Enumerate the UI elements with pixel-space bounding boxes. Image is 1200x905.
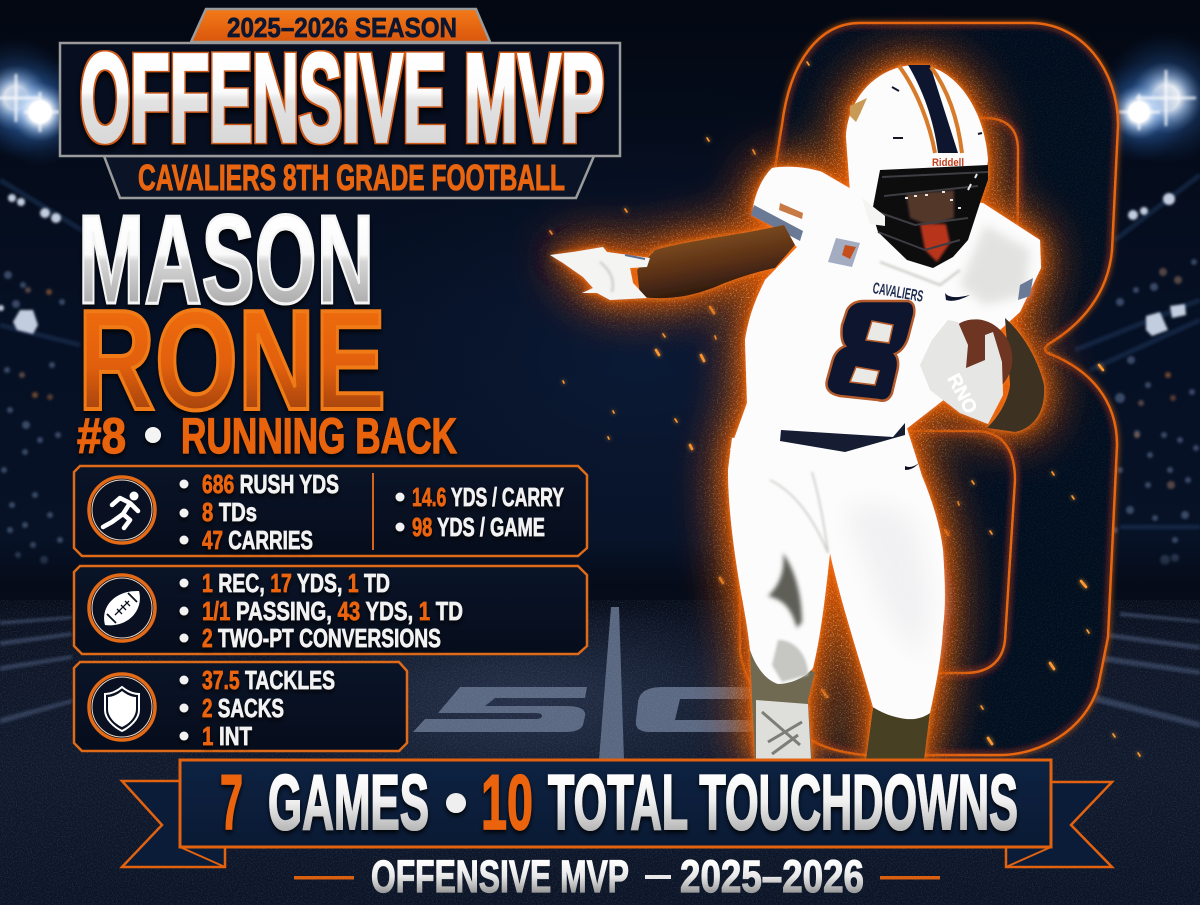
ribbon headline: 7: [220, 758, 243, 846]
rushing list: 686 RUSH YDS: [202, 469, 339, 499]
pants: [728, 422, 945, 719]
yard lines: [0, 612, 1200, 728]
brand mark: Riddell: [932, 157, 964, 169]
far lower leg and cleat: [750, 650, 815, 760]
field: [0, 540, 1200, 905]
icon: runner: [89, 477, 155, 543]
rushing list: 47 CARRIES: [202, 525, 313, 555]
rate list: 98 YDS / GAME: [412, 512, 545, 542]
receiving list: 2 TWO-PT CONVERSIONS: [202, 623, 441, 653]
panel: defensive stats: [74, 662, 407, 751]
jersey number and position: [77, 408, 457, 464]
season tab: 2025–2026 SEASON: [227, 12, 457, 43]
chest wordmark: CAVALIERS: [871, 280, 925, 306]
jersey number and position: #8: [77, 408, 126, 464]
carrying arm: [987, 318, 1044, 432]
rushing list: 8 TDs: [202, 497, 257, 527]
jersey: [730, 167, 1041, 450]
icon: football: [89, 575, 155, 641]
subtitle tab: CAVALIERS 8TH GRADE FOOTBALL: [138, 157, 565, 198]
ribbon main: [180, 760, 1051, 847]
subtitle tab: [104, 156, 594, 198]
rushing list: [180, 469, 339, 555]
player: [550, 65, 1044, 760]
ribbon headline: 10: [481, 758, 533, 846]
helmet: [846, 65, 988, 268]
panel: receiving and passing stats: [74, 566, 587, 654]
near shin: [866, 708, 930, 760]
footer tagline: OFFENSIVE MVP: [371, 851, 629, 902]
stand rails: [0, 175, 1200, 527]
carrying glove: [920, 320, 1003, 424]
receiving list: 1/1 PASSING, 43 YDS, 1 TD: [202, 596, 463, 626]
painted number 0: [636, 687, 760, 732]
crowd highlights: [0, 193, 1186, 336]
defensive list: 37.5 TACKLES: [202, 665, 335, 695]
extended arm: [637, 225, 795, 298]
pointing glove: [550, 247, 650, 300]
ribbon headline: GAMES: [268, 758, 429, 846]
rate list: [396, 482, 564, 542]
giant outlined number 8: [740, 23, 1118, 755]
receiving list: 1 REC, 17 YDS, 1 TD: [202, 568, 390, 598]
chest logo: [828, 238, 860, 267]
receiving list: [180, 568, 463, 653]
star dust inside the number: [778, 23, 1118, 755]
defensive list: [180, 665, 335, 751]
footer tagline: [294, 851, 940, 902]
painted number 5: [413, 687, 587, 732]
ribbon tail left: [122, 781, 225, 867]
football: [931, 309, 1023, 405]
ribbon tail right: [1006, 782, 1112, 867]
sleeve stripes: [751, 205, 803, 241]
carrying glove: RNO: [943, 370, 981, 417]
jersey number and position: RUNNING BACK: [181, 408, 457, 464]
icon: shield: [89, 674, 155, 740]
helmet logo: [850, 98, 867, 122]
swoosh: [945, 293, 970, 301]
jersey number 8: [827, 301, 914, 401]
footer tagline: 2025–2026: [680, 851, 864, 902]
flying embers: [550, 62, 1140, 756]
rate list: 14.6 YDS / CARRY: [412, 482, 564, 512]
crowd stands right: [1112, 259, 1199, 565]
main title box: OFFENSIVE MVP: [80, 29, 604, 168]
helmet stripe: [908, 65, 958, 153]
crowd stands left: [1, 271, 65, 564]
face mask: [872, 165, 988, 268]
defensive list: 2 SACKS: [202, 693, 284, 723]
player name last: RONE: [78, 281, 386, 440]
defensive list: 1 INT: [202, 721, 252, 751]
bottom ribbon banner: [122, 758, 1112, 867]
main title box: [60, 29, 620, 168]
stadium lights right: [1089, 32, 1200, 164]
player name first: MASON: [78, 189, 374, 330]
ribbon headline: [220, 758, 1018, 846]
panel: rushing stats: [74, 466, 587, 556]
midfield line: [599, 607, 624, 760]
stadium lights left: [0, 38, 94, 166]
header plaque: [60, 9, 620, 198]
belt: [780, 423, 905, 452]
